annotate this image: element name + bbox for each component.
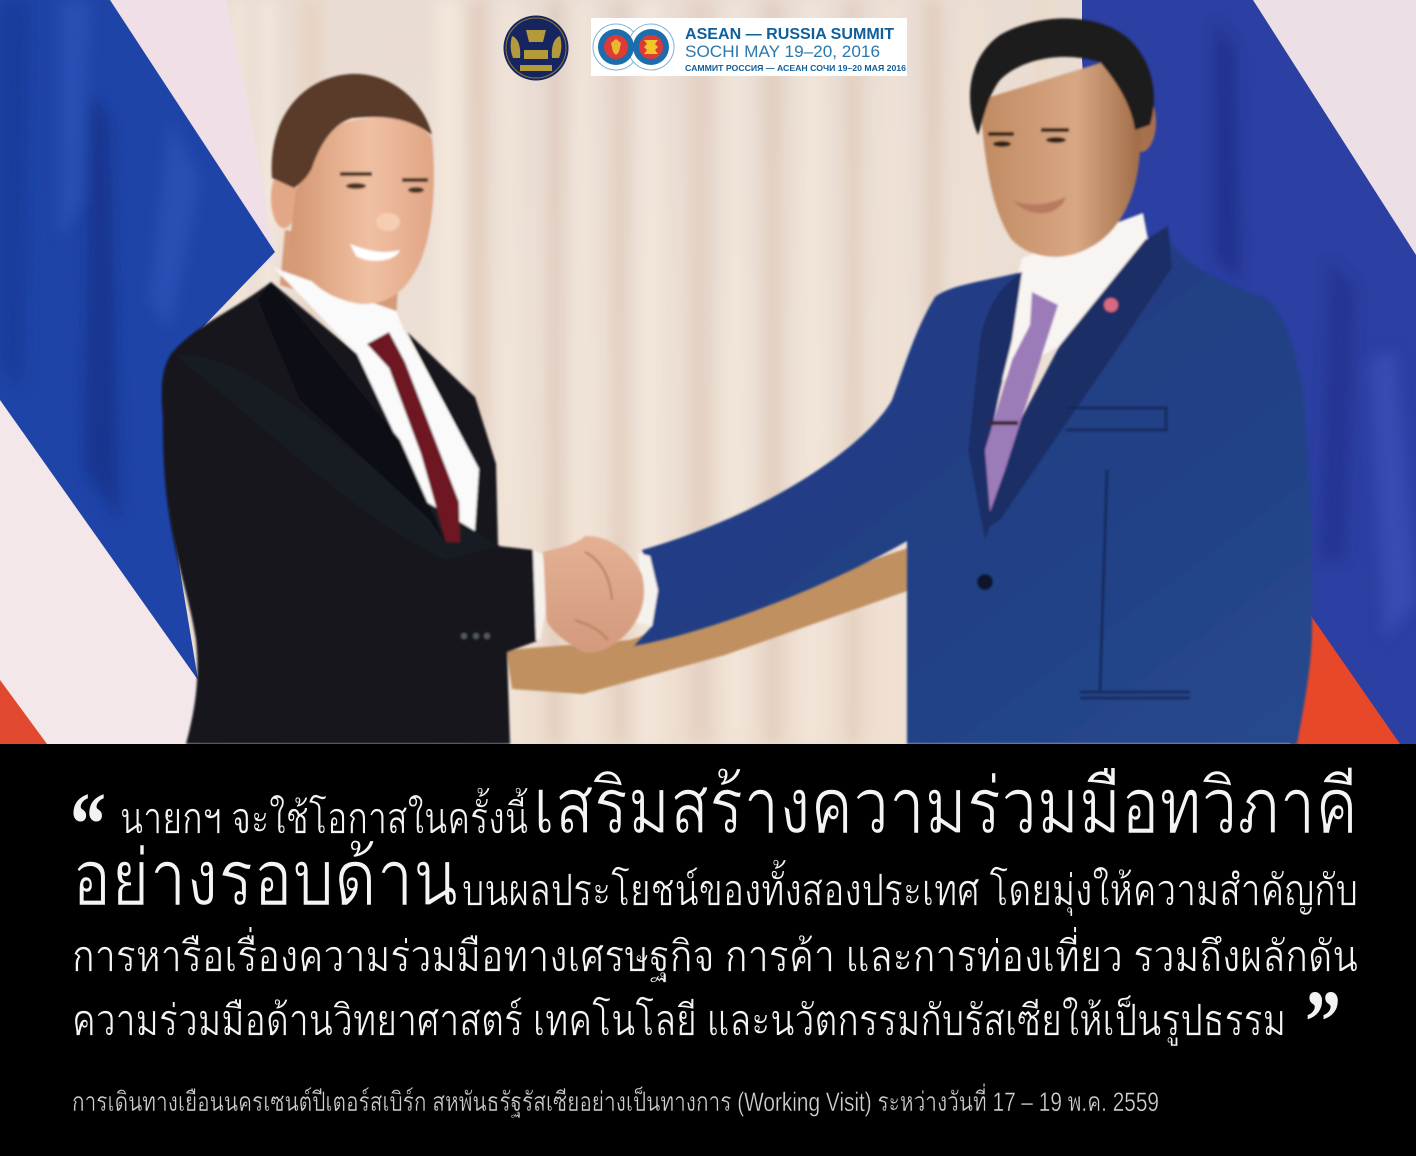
ear <box>271 168 297 228</box>
smile <box>350 244 400 261</box>
face <box>290 117 434 304</box>
nose shading <box>376 213 400 231</box>
black text panel <box>0 744 1416 1156</box>
person: right leader in navy suit <box>634 18 1312 744</box>
dark jacket <box>162 282 537 744</box>
summit russian line: САММИТ РОССИЯ — АСЕАН СОЧИ 19–20 МАЯ 2016 <box>685 63 906 73</box>
quote line 2: อย่างรอบด้าน <box>72 834 458 922</box>
lapels <box>968 272 1022 540</box>
seal emblem <box>511 30 561 71</box>
opening quotation mark: “ <box>70 775 106 874</box>
hair <box>970 18 1154 135</box>
hair <box>272 74 432 188</box>
curtain backdrop <box>0 0 1416 744</box>
summit title: ASEAN — RUSSIA SUMMIT <box>685 26 895 43</box>
jacket pockets <box>1066 408 1190 698</box>
quote line 2 <box>72 834 1358 922</box>
lapel pin <box>1104 298 1118 312</box>
summit logo panel <box>591 18 907 76</box>
government seal <box>504 16 568 80</box>
neck and shirt <box>994 213 1150 385</box>
tie clip <box>988 421 1018 425</box>
quote line 1: นายกฯ จะใช้โอกาสในครั้งนี้ <box>120 787 528 843</box>
navy jacket <box>634 240 1312 744</box>
purple tie <box>985 292 1058 512</box>
jacket sleeve buttons <box>461 633 490 639</box>
linked rings emblem <box>593 24 674 70</box>
photo: two leaders shaking hands <box>0 0 1416 744</box>
dark red tie <box>367 332 460 542</box>
summit place and date: SOCHI MAY 19–20, 2016 <box>685 42 880 61</box>
handshake <box>543 536 644 653</box>
eyes <box>988 128 1069 147</box>
right flag (Russia) <box>1082 0 1416 744</box>
left flag (Thailand) <box>0 0 275 744</box>
shirt <box>274 268 479 544</box>
face <box>980 60 1140 257</box>
person: left leader in dark suit <box>162 74 548 744</box>
jacket button <box>977 574 993 590</box>
ear <box>1126 92 1156 152</box>
neck <box>280 230 400 320</box>
eyes <box>340 172 428 193</box>
shirt cuff <box>533 550 548 640</box>
smile <box>1012 197 1066 213</box>
quote line 1 <box>120 762 1358 850</box>
closing quotation mark: ” <box>1305 973 1341 1072</box>
shirt cuff <box>634 553 658 626</box>
shadow cast by the handshake arm <box>506 548 910 694</box>
